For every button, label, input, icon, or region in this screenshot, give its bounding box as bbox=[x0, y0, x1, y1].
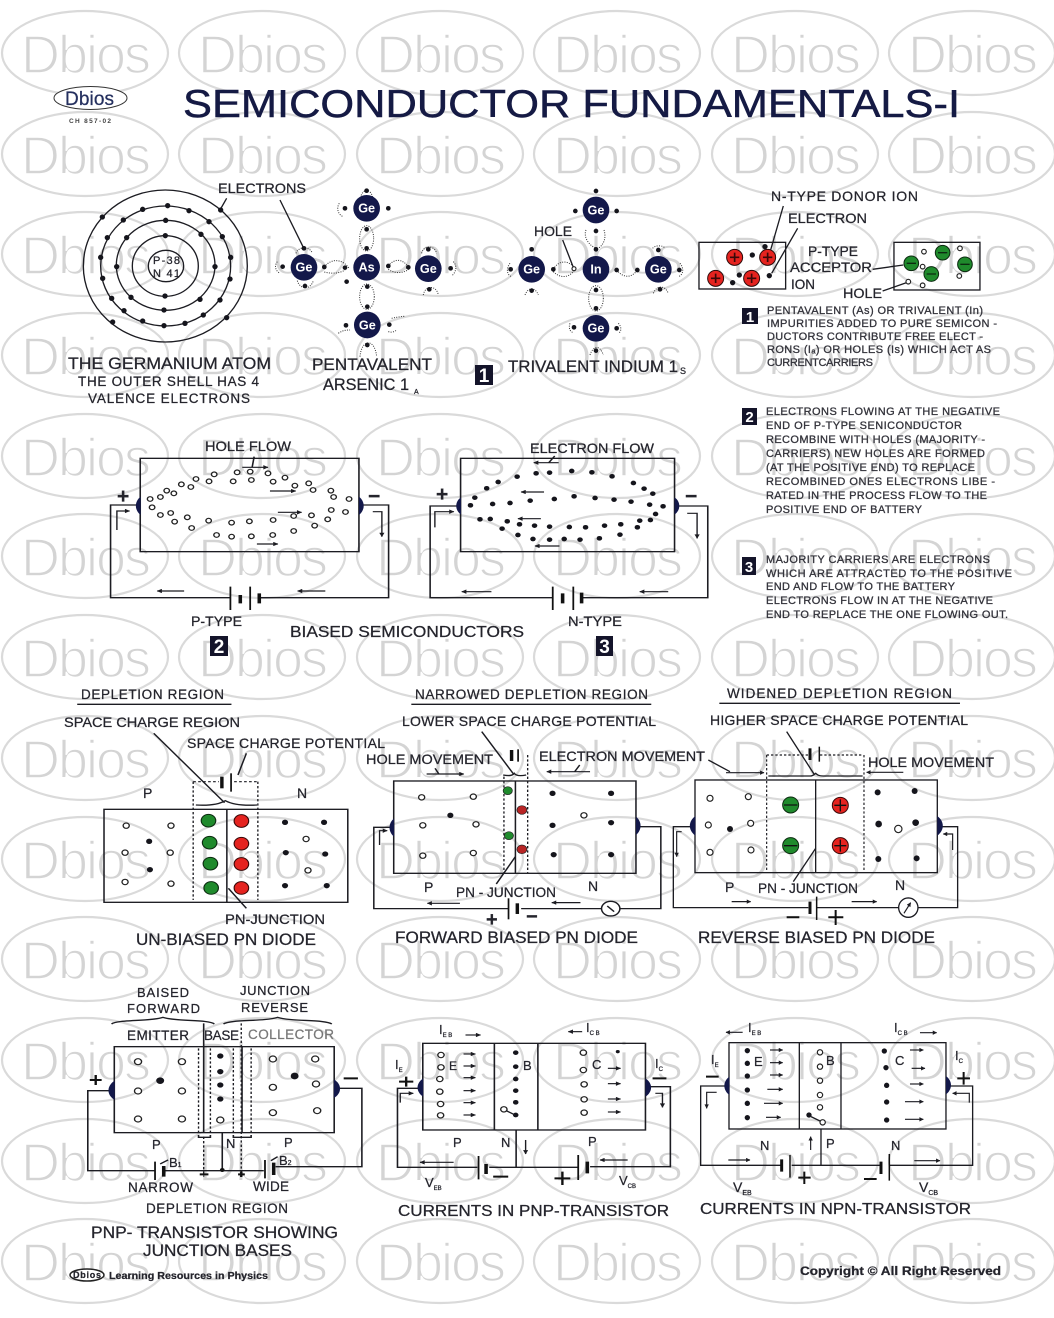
label: I emitter-base: E B bbox=[443, 1033, 452, 1039]
label: hole: HOLE bbox=[843, 285, 882, 301]
watermark pattern: Dbios bbox=[731, 1233, 861, 1293]
watermark pattern: Dbios bbox=[553, 629, 683, 689]
label: higher space charge potential: HIGHER SPACE CHARGE POTENTIAL bbox=[710, 712, 968, 728]
watermark pattern: Dbios bbox=[553, 226, 683, 286]
watermark pattern: Dbios bbox=[553, 1133, 683, 1193]
label: forward: FORWARD bbox=[127, 1001, 200, 1016]
panel: germanium atom bbox=[68, 180, 306, 406]
label: B: B bbox=[826, 1053, 835, 1068]
heading: widened depletion region: WIDENED DEPLETION REGION bbox=[727, 686, 952, 701]
diagram: indium lattice: Ge bbox=[588, 322, 604, 336]
caption: forward biased diode: FORWARD BIASED PN DIODE bbox=[395, 929, 638, 947]
panel: donor and acceptor ions bbox=[699, 188, 980, 301]
caption: subscript A: A bbox=[414, 389, 419, 396]
text block 3: END AND FLOW TO THE BATTERY bbox=[766, 581, 956, 593]
panel: trivalent indium bbox=[507, 189, 686, 376]
label: E: E bbox=[449, 1059, 457, 1073]
watermark pattern: Dbios bbox=[731, 1032, 861, 1092]
watermark pattern: Dbios bbox=[908, 1032, 1038, 1092]
label: wide: WIDE bbox=[253, 1179, 289, 1194]
caption: pnp transistor line 1: PNP- TRANSISTOR SHOWING bbox=[91, 1224, 338, 1242]
label: emitter: EMITTER bbox=[127, 1028, 189, 1043]
watermark pattern: Dbios bbox=[21, 931, 151, 991]
watermark pattern: Dbios bbox=[376, 1032, 506, 1092]
text block 2: RECOMBINED ONES ELECTRONS LIBE - bbox=[766, 476, 995, 488]
diagram: arsenic lattice: Ge bbox=[296, 261, 312, 275]
watermark pattern: Dbios bbox=[731, 226, 861, 286]
watermark pattern: Dbios bbox=[908, 25, 1038, 85]
watermark pattern: Dbios bbox=[908, 831, 1038, 891]
watermark pattern: Dbios bbox=[731, 327, 861, 387]
watermark pattern: Dbios bbox=[21, 25, 151, 85]
panel: currents in npn transistor bbox=[700, 1020, 973, 1218]
watermark pattern: Dbios bbox=[21, 1133, 151, 1193]
text block 3: MAJORITY CARRIERS ARE ELECTRONS bbox=[766, 554, 990, 566]
heading: depletion region: DEPLETION REGION bbox=[81, 687, 224, 702]
watermark pattern: Dbios bbox=[553, 1233, 683, 1293]
badge 3 bbox=[596, 636, 613, 658]
label: space charge region: SPACE CHARGE REGION bbox=[64, 714, 240, 730]
caption: arsenic: ARSENIC 1 bbox=[323, 375, 409, 394]
watermark pattern: Dbios bbox=[198, 931, 328, 991]
caption: germanium atom: THE GERMANIUM ATOM bbox=[68, 354, 271, 373]
watermark pattern: Dbios bbox=[376, 831, 506, 891]
watermark pattern: Dbios bbox=[553, 931, 683, 991]
label: electron: ELECTRON bbox=[788, 210, 867, 226]
watermark pattern: Dbios bbox=[21, 226, 151, 286]
caption: currents in npn: CURRENTS IN NPN-TRANSISTOR bbox=[700, 1201, 971, 1218]
label: P: P bbox=[424, 879, 433, 895]
badge 1: 1 bbox=[479, 366, 490, 387]
watermark pattern: Dbios bbox=[731, 931, 861, 991]
caption: outer shell line 1: THE OUTER SHELL HAS 4 bbox=[78, 374, 259, 389]
label: P: P bbox=[453, 1135, 462, 1150]
watermark pattern: Dbios bbox=[553, 428, 683, 488]
label: pn-junction: PN-JUNCTION bbox=[225, 911, 325, 927]
label: electrons: ELECTRONS bbox=[218, 180, 306, 196]
label: VEB: V bbox=[425, 1175, 434, 1190]
watermark pattern: Dbios bbox=[731, 428, 861, 488]
label: hole movement: HOLE MOVEMENT bbox=[868, 754, 994, 770]
diagram: indium lattice: Ge bbox=[650, 263, 667, 277]
label: plus terminal: + bbox=[436, 483, 448, 506]
watermark pattern: Dbios bbox=[376, 327, 506, 387]
diagram: arsenic lattice: Ge bbox=[359, 318, 376, 332]
watermark pattern: Dbios bbox=[553, 831, 683, 891]
watermark pattern: Dbios bbox=[21, 428, 151, 488]
watermark pattern: Dbios bbox=[908, 1233, 1038, 1293]
label: hole: HOLE bbox=[534, 223, 572, 239]
label: VEB: V bbox=[733, 1179, 742, 1195]
caption: currents in pnp: CURRENTS IN PNP-TRANSISTOR bbox=[398, 1203, 669, 1220]
label: N base: N bbox=[226, 1136, 235, 1151]
label: B1: B1 bbox=[169, 1155, 182, 1170]
label: P collector: P bbox=[284, 1135, 293, 1150]
watermark pattern: Dbios bbox=[21, 327, 151, 387]
label: I emitter: I bbox=[711, 1052, 715, 1067]
diagram: n-type circuit bbox=[430, 456, 708, 610]
watermark pattern: Dbios bbox=[198, 629, 328, 689]
badge 2 bbox=[210, 636, 228, 658]
text block 1: IMPURITIES ADDED TO PURE SEMICON - bbox=[767, 318, 997, 330]
label: minus terminal: − bbox=[685, 485, 697, 508]
watermark pattern: Dbios bbox=[731, 831, 861, 891]
text block 3: 3 bbox=[745, 559, 753, 576]
label: P: P bbox=[725, 879, 734, 895]
watermark pattern: Dbios bbox=[21, 1032, 151, 1092]
label: N right: N bbox=[891, 1138, 900, 1153]
label: I collector: I bbox=[955, 1048, 959, 1063]
panel: p-type biased semiconductor bbox=[111, 438, 389, 658]
panel: forward biased pn diode bbox=[366, 687, 705, 947]
label: N: N bbox=[501, 1135, 510, 1150]
watermark pattern: Dbios bbox=[376, 428, 506, 488]
watermark pattern: Dbios bbox=[198, 730, 328, 790]
text block 2: RATED IN THE PROCESS FLOW TO THE bbox=[766, 490, 987, 502]
watermark pattern: Dbios bbox=[908, 126, 1038, 186]
label: N: N bbox=[588, 878, 598, 894]
label: VCB: CB bbox=[628, 1184, 636, 1190]
label: I collector: C bbox=[659, 1067, 664, 1073]
label: VCB: V bbox=[919, 1179, 928, 1195]
watermark pattern: Dbios bbox=[908, 428, 1038, 488]
label: p-type: P-TYPE bbox=[808, 243, 858, 259]
text block 2: 2 bbox=[745, 409, 754, 426]
watermark pattern: Dbios bbox=[731, 629, 861, 689]
label: pn-junction: PN - JUNCTION bbox=[758, 880, 858, 896]
watermark pattern: Dbios bbox=[908, 528, 1038, 588]
caption: un-biased diode: UN-BIASED PN DIODE bbox=[136, 931, 316, 949]
label: I emitter-base: I bbox=[748, 1020, 752, 1035]
panel: n-type biased semiconductor bbox=[430, 440, 708, 658]
watermark pattern: Dbios bbox=[376, 931, 506, 991]
watermark pattern: Dbios bbox=[908, 327, 1038, 387]
diagram: indium lattice: In bbox=[590, 263, 602, 277]
label: I emitter-base: I bbox=[439, 1022, 443, 1037]
label: P emitter: P bbox=[152, 1137, 161, 1152]
watermark pattern: Dbios bbox=[21, 528, 151, 588]
watermark pattern: Dbios bbox=[21, 1233, 151, 1293]
label: pn-junction: PN - JUNCTION bbox=[456, 884, 556, 900]
watermark pattern: Dbios bbox=[553, 730, 683, 790]
label: n-type donor ion: N-TYPE DONOR ION bbox=[771, 188, 918, 204]
watermark pattern: Dbios bbox=[731, 528, 861, 588]
logo: Dbios bbox=[54, 86, 127, 125]
badge 3: 3 bbox=[599, 637, 610, 658]
watermark pattern: Dbios bbox=[198, 528, 328, 588]
text block 3: ELECTRONS FLOW IN AT THE NEGATIVE bbox=[766, 595, 993, 607]
label: N: N bbox=[895, 877, 905, 893]
label: I collector-base: I bbox=[894, 1020, 898, 1035]
label: C: C bbox=[592, 1057, 601, 1072]
label: I collector-base: C B bbox=[898, 1031, 908, 1037]
caption: subscript S: S bbox=[680, 366, 686, 376]
panel: currents in pnp transistor bbox=[395, 1020, 670, 1220]
label: VEB: EB bbox=[742, 1190, 752, 1197]
logo: Dbios: CH 857-02 bbox=[69, 118, 111, 125]
watermark pattern: Dbios bbox=[376, 1233, 506, 1293]
diagram: npn currents bbox=[701, 1032, 973, 1184]
watermark pattern: Dbios bbox=[553, 126, 683, 186]
diagram: arsenic lattice: Ge bbox=[420, 262, 437, 276]
watermark pattern: Dbios bbox=[198, 327, 328, 387]
label: lower space charge potential: LOWER SPACE CHARGE POTENTIAL bbox=[402, 713, 656, 729]
text block 2: (AT THE POSITIVE END) TO REPLACE bbox=[766, 462, 975, 474]
diagram: p-type circuit bbox=[111, 457, 389, 610]
text block 3: WHICH ARE ATTRACTED TO THE POSITIVE bbox=[766, 568, 1012, 580]
label: n-type: N-TYPE bbox=[568, 613, 622, 629]
label: I emitter: E bbox=[399, 1068, 403, 1074]
diagram: indium lattice: Ge bbox=[523, 263, 540, 277]
badge 2: 2 bbox=[214, 637, 224, 658]
label: minus terminal: − bbox=[368, 485, 380, 508]
watermark pattern: Dbios bbox=[198, 226, 328, 286]
text block 1: PENTAVALENT (As) OR TRIVALENT (In) bbox=[767, 305, 983, 317]
watermark pattern: Dbios bbox=[198, 831, 328, 891]
label: space charge potential: SPACE CHARGE POTENTIAL bbox=[187, 735, 385, 751]
label: VEB: EB bbox=[434, 1186, 442, 1192]
label: E: E bbox=[754, 1054, 763, 1069]
watermark pattern: Dbios bbox=[908, 629, 1038, 689]
label: P: P bbox=[826, 1136, 835, 1151]
caption: outer shell line 2: VALENCE ELECTRONS bbox=[88, 391, 250, 406]
watermark pattern: Dbios bbox=[376, 730, 506, 790]
label: B2: B2 bbox=[279, 1153, 292, 1168]
watermark pattern: Dbios bbox=[376, 226, 506, 286]
watermark pattern: Dbios bbox=[376, 629, 506, 689]
watermark pattern: Dbios bbox=[908, 226, 1038, 286]
label: hole movement: HOLE MOVEMENT bbox=[366, 751, 493, 767]
watermark pattern: Dbios bbox=[731, 730, 861, 790]
label: N: N bbox=[297, 785, 307, 801]
watermark pattern: Dbios bbox=[198, 126, 328, 186]
watermark pattern: Dbios bbox=[376, 1133, 506, 1193]
watermark pattern: Dbios bbox=[198, 1233, 328, 1293]
text block 2: RECOMBINE WITH HOLES (MAJORITY - bbox=[766, 434, 985, 446]
text block 1 bbox=[742, 305, 997, 369]
watermark pattern: Dbios bbox=[198, 1032, 328, 1092]
diagram: arsenic lattice: Ge bbox=[358, 202, 375, 216]
title: SEMICONDUCTOR FUNDAMENTALS-I bbox=[183, 83, 960, 126]
footer: learning resources bbox=[70, 1269, 268, 1282]
watermark pattern: Dbios bbox=[198, 25, 328, 85]
label: electron movement: ELECTRON MOVEMENT bbox=[539, 748, 705, 764]
text block 2 bbox=[742, 406, 1000, 516]
panel: pnp transistor junction bases bbox=[88, 983, 362, 1260]
diagram: forward biased diode bbox=[374, 704, 661, 919]
label: P right: P bbox=[588, 1134, 597, 1149]
caption: pentavalent: PENTAVALENT bbox=[312, 355, 432, 374]
text block 1: RONS (Iₐ) OR HOLES (Is) WHICH ACT AS bbox=[767, 344, 991, 356]
label: I emitter: E bbox=[715, 1063, 719, 1069]
footer: learning resources: Dbios bbox=[73, 1270, 101, 1280]
caption: biased semiconductors: BIASED SEMICONDUCTORS bbox=[290, 624, 524, 641]
diagram: arsenic lattice bbox=[275, 188, 456, 357]
watermark pattern: Dbios bbox=[21, 629, 151, 689]
watermark pattern: Dbios bbox=[553, 25, 683, 85]
footer: learning resources: Learning Resources in Physics bbox=[109, 1271, 268, 1282]
badge 1 bbox=[475, 365, 493, 387]
diagram: indium lattice bbox=[507, 189, 683, 355]
diagram: unbiased diode bbox=[77, 704, 348, 908]
label: base: BASE bbox=[204, 1028, 239, 1043]
label: N left: N bbox=[760, 1138, 769, 1153]
watermark pattern: Dbios bbox=[731, 25, 861, 85]
watermark pattern: Dbios bbox=[553, 528, 683, 588]
text block 3: END TO REPLACE THE ONE FLOWING OUT. bbox=[766, 609, 1008, 621]
watermark pattern: Dbios bbox=[376, 25, 506, 85]
label: I emitter: I bbox=[395, 1057, 399, 1072]
caption: pnp transistor line 2: JUNCTION BASES bbox=[143, 1242, 292, 1260]
label: depletion region: DEPLETION REGION bbox=[146, 1201, 288, 1216]
text block 1: DUCTORS CONTRIBUTE FREE ELECT - bbox=[767, 331, 983, 343]
watermark pattern: Dbios bbox=[376, 528, 506, 588]
label: P: P bbox=[143, 785, 152, 801]
label: VCB: V bbox=[619, 1173, 628, 1188]
diagram: pnp transistor bbox=[88, 1017, 362, 1180]
watermark pattern: Dbios bbox=[553, 327, 683, 387]
label: electron flow: ELECTRON FLOW bbox=[530, 440, 655, 456]
label: junction: JUNCTION bbox=[240, 983, 310, 998]
label: VCB: CB bbox=[928, 1190, 938, 1197]
caption: trivalent indium: TRIVALENT INDIUM 1 bbox=[508, 357, 678, 376]
diagram: reverse biased diode bbox=[673, 703, 960, 925]
watermark pattern: Dbios bbox=[198, 1133, 328, 1193]
label: collector: COLLECTOR bbox=[248, 1027, 334, 1042]
label: I collector: C bbox=[959, 1059, 964, 1065]
label: plus terminal: + bbox=[117, 485, 129, 508]
label: nucleus neutron count: N 41 bbox=[153, 268, 180, 280]
watermark pattern: Dbios bbox=[21, 730, 151, 790]
watermark pattern: Dbios bbox=[553, 1032, 683, 1092]
label: plus: + bbox=[486, 909, 498, 931]
label: hole flow: HOLE FLOW bbox=[205, 438, 292, 454]
footer: copyright: Copyright © All Right Reserved bbox=[800, 1264, 1001, 1278]
panel: pentavalent arsenic bbox=[275, 188, 456, 396]
label: narrow: NARROW bbox=[128, 1180, 193, 1195]
heading: narrowed depletion region: NARROWED DEPLETION REGION bbox=[415, 687, 648, 702]
label: C: C bbox=[895, 1053, 904, 1068]
label: I emitter-base: E B bbox=[752, 1031, 761, 1037]
label: reverse: REVERSE bbox=[241, 1000, 308, 1015]
label: acceptor: ACCEPTOR bbox=[790, 259, 872, 275]
text block 1: 1 bbox=[746, 309, 754, 326]
label: I collector-base: I bbox=[586, 1020, 590, 1035]
label: ion: ION bbox=[791, 276, 815, 292]
watermark pattern: Dbios bbox=[198, 428, 328, 488]
watermark pattern: Dbios bbox=[21, 126, 151, 186]
diagram: indium lattice: Ge bbox=[588, 203, 604, 217]
diagram: donor and acceptor boxes bbox=[699, 206, 980, 291]
diagram: atom shells and electrons bbox=[83, 190, 247, 342]
watermark pattern: Dbios bbox=[21, 831, 151, 891]
label: I collector-base: C B bbox=[590, 1031, 600, 1037]
diagram: arsenic lattice: As bbox=[359, 261, 375, 275]
caption: reverse biased diode: REVERSE BIASED PN DIODE bbox=[698, 929, 935, 947]
label: nucleus proton count: P-38 bbox=[153, 255, 180, 267]
watermark pattern: Dbios bbox=[376, 126, 506, 186]
label: B: B bbox=[523, 1058, 532, 1073]
text block 1: CURRENTCARRIERS bbox=[767, 357, 873, 369]
text block 2: POSITIVE END OF BATTERY bbox=[766, 504, 923, 516]
watermark pattern: Dbios bbox=[908, 931, 1038, 991]
watermark pattern: Dbios bbox=[731, 126, 861, 186]
label: minus: − bbox=[526, 906, 538, 928]
panel: un-biased pn diode bbox=[64, 687, 385, 949]
watermark pattern: Dbios bbox=[731, 1133, 861, 1193]
label: I collector: I bbox=[655, 1056, 659, 1071]
text block 3 bbox=[742, 554, 1012, 621]
text block 2: CARRIERS) NEW HOLES ARE FORMED bbox=[766, 448, 985, 460]
label: p-type: P-TYPE bbox=[191, 613, 242, 629]
text block 2: ELECTRONS FLOWING AT THE NEGATIVE bbox=[766, 406, 1000, 418]
label: baised: BAISED bbox=[137, 985, 189, 1000]
watermark pattern: Dbios bbox=[908, 1133, 1038, 1193]
logo: Dbios: Dbios bbox=[65, 89, 114, 110]
diagram: pnp currents bbox=[397, 1032, 670, 1185]
text block 2: END OF P-TYPE SENICONDUCTOR bbox=[766, 420, 962, 432]
watermark pattern: Dbios bbox=[908, 730, 1038, 790]
panel: reverse biased pn diode bbox=[673, 686, 994, 947]
